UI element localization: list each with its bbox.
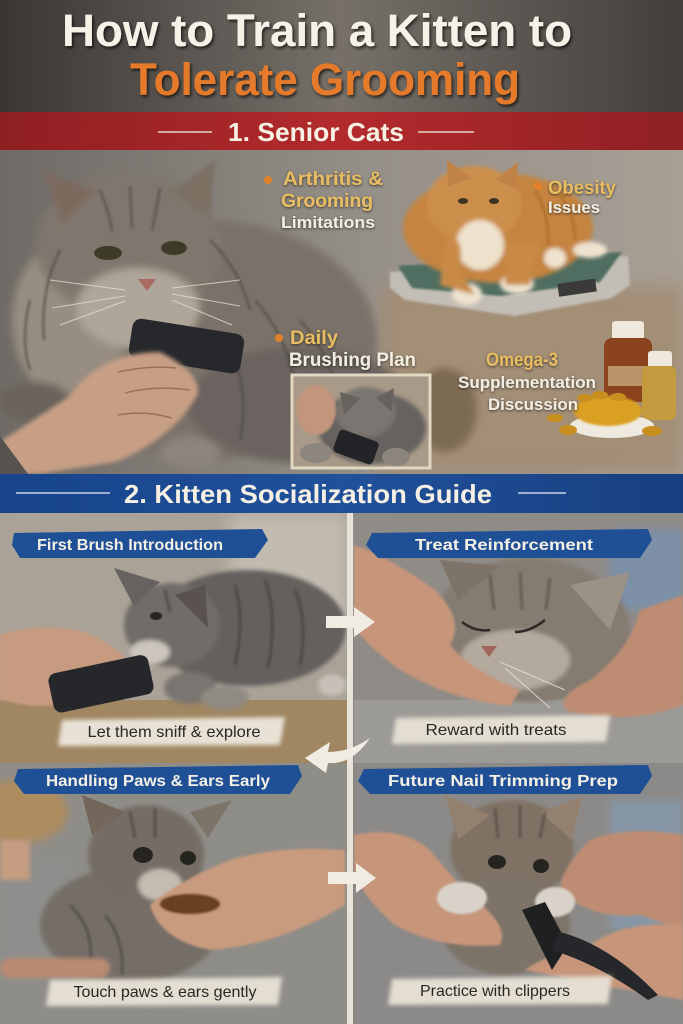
banner: future nail trimming prep: Future Nail Trimming Prep: [388, 773, 618, 790]
arrow: step three to four: [328, 863, 376, 893]
kitten eating treat: [40, 795, 232, 983]
banner: first brush introduction: [12, 529, 268, 558]
panel: first brush introduction: [0, 513, 348, 763]
label: arthritis: Arthritis &: [283, 169, 383, 190]
inset photo: daily brushing: [292, 368, 477, 468]
caption: reward with treats: Reward with treats: [426, 722, 566, 739]
caption: sniff and explore: Let them sniff & explore: [88, 724, 261, 741]
label: arthritis: Grooming: [281, 191, 373, 212]
panel: senior cats: [0, 150, 683, 474]
caption: practice with clippers: Practice with clippers: [420, 983, 570, 1000]
panel: future nail trimming prep: [354, 763, 683, 1024]
arrow: step two to three: [305, 738, 370, 773]
caption: reward with treats: [392, 715, 610, 744]
large grey cat with brush: [0, 160, 412, 468]
banner: handling paws and ears: [14, 765, 302, 794]
caption: touch paws and ears: Touch paws & ears gently: [74, 984, 256, 1001]
panel: treat reinforcement: [354, 513, 683, 763]
section bar: kitten socialization guide: 2. Kitten Socialization Guide: [124, 479, 492, 509]
label: daily brushing plan: Brushing Plan: [289, 350, 416, 371]
banner: treat reinforcement: [366, 529, 652, 558]
caption: touch paws and ears: [46, 977, 282, 1006]
title banner: [0, 0, 683, 112]
label: obesity: Issues: [548, 198, 600, 217]
section bar: kitten socialization guide: [0, 474, 683, 513]
label: omega-3: Supplementation: [458, 373, 596, 392]
caption: practice with clippers: [388, 976, 612, 1005]
label: obesity: Obesity: [548, 178, 616, 199]
label: obesity: [534, 178, 616, 217]
kitten sniffing brush: [114, 568, 346, 710]
orange cat on scale: [390, 160, 630, 316]
hands cupping kitten: [354, 545, 683, 717]
banner: first brush introduction: First Brush Introduction: [37, 537, 223, 554]
banner: handling paws and ears: Handling Paws & Ears Early: [46, 773, 270, 790]
hands holding paw: [354, 831, 683, 1000]
label: omega-3: [458, 350, 596, 414]
nail clippers: [522, 902, 658, 1000]
label: arthritis: [264, 169, 383, 232]
supplement bottles and capsules: [547, 321, 676, 438]
banner: future nail trimming prep: [358, 765, 652, 794]
label: daily brushing plan: Daily: [290, 328, 338, 349]
hand with brush: [0, 628, 155, 714]
section bar: senior cats: 1. Senior Cats: [228, 117, 404, 147]
title line 2: Tolerate Grooming: [130, 54, 520, 105]
kitten being rewarded: [430, 558, 630, 708]
label: arthritis: Limitations: [281, 213, 375, 232]
label: daily brushing plan: [275, 328, 416, 371]
arrow: step one to two: [326, 607, 375, 637]
panel: handling paws and ears: [0, 763, 348, 1024]
panel divider: [347, 513, 353, 1024]
hand offering treats: [0, 849, 345, 978]
title line 1: How to Train a Kitten to: [62, 5, 572, 56]
caption: sniff and explore: [58, 717, 285, 746]
banner: treat reinforcement: Treat Reinforcement: [415, 537, 594, 554]
label: omega-3: Omega-3: [486, 350, 558, 371]
grooming brush and hand: [0, 317, 245, 474]
section bar: senior cats: [0, 112, 683, 150]
label: omega-3: Discussion: [488, 395, 578, 414]
kitten with paw held: [440, 795, 582, 975]
